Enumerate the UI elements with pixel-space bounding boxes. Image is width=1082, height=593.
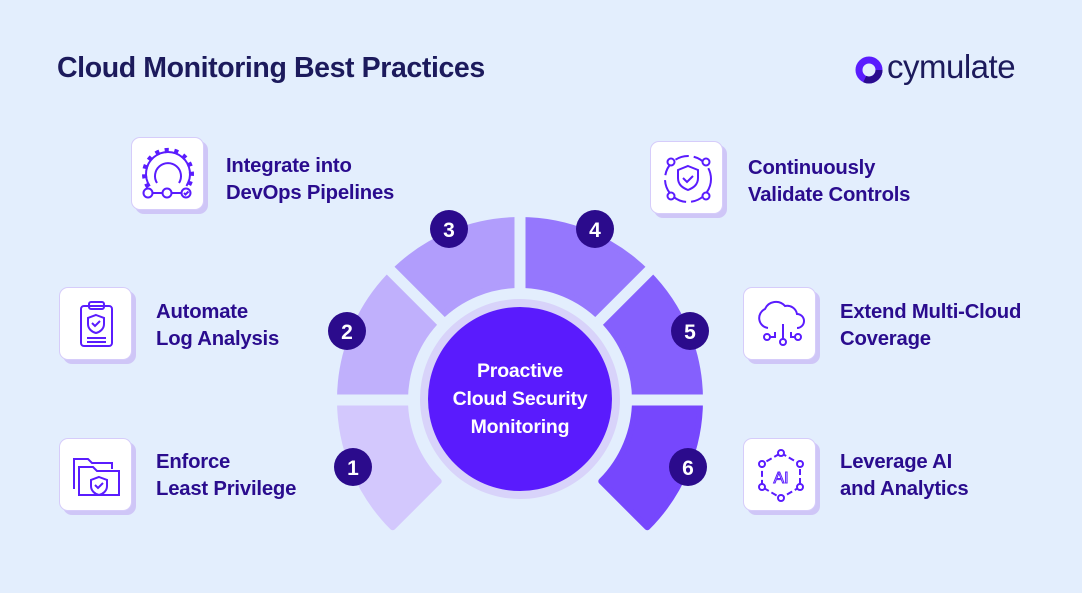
card: Log Analysis <box>59 287 132 360</box>
text: 4 <box>589 219 601 242</box>
title: Cloud Monitoring Best Practices <box>57 52 485 84</box>
label: AI: Leverage AI <box>840 451 952 473</box>
label: Log Analysis <box>156 301 279 350</box>
label: Validate Controls: Continuously <box>748 157 875 179</box>
label: Multi-Cloud: Extend Multi-Cloud <box>840 301 1021 323</box>
label: AI: and Analytics <box>840 478 969 500</box>
text: 6 <box>682 457 694 480</box>
label: DevOps: Integrate into <box>226 155 352 177</box>
center text: Monitoring <box>471 416 569 438</box>
center text <box>453 360 588 438</box>
label: Least Privilege: Least Privilege <box>156 478 296 500</box>
label: Least Privilege: Enforce <box>156 451 230 473</box>
card: DevOps <box>131 137 204 210</box>
label: DevOps: DevOps Pipelines <box>226 182 394 204</box>
text: 3 <box>443 219 455 242</box>
card: AI: AI <box>773 470 789 487</box>
label: Least Privilege <box>156 451 296 500</box>
card: Multi-Cloud <box>743 287 816 360</box>
text: 5 <box>684 321 696 344</box>
label: Log Analysis: Automate <box>156 301 248 323</box>
label: DevOps <box>226 155 394 204</box>
center text: Cloud Security <box>453 388 587 410</box>
label: AI <box>840 451 969 500</box>
text: 2 <box>341 321 353 344</box>
label: Validate Controls: Validate Controls <box>748 184 910 206</box>
logo: cymulate: cymulate <box>887 48 1015 85</box>
card: AI <box>743 438 816 511</box>
card: Least Privilege <box>59 438 132 511</box>
badges <box>328 210 709 486</box>
text: 1 <box>347 457 359 480</box>
card: Validate Controls <box>650 141 723 214</box>
center text: Proactive <box>477 360 563 382</box>
label: Log Analysis: Log Analysis <box>156 328 279 350</box>
label: Multi-Cloud <box>840 301 1021 350</box>
label: Multi-Cloud: Coverage <box>840 328 931 350</box>
label: Validate Controls <box>748 157 910 206</box>
